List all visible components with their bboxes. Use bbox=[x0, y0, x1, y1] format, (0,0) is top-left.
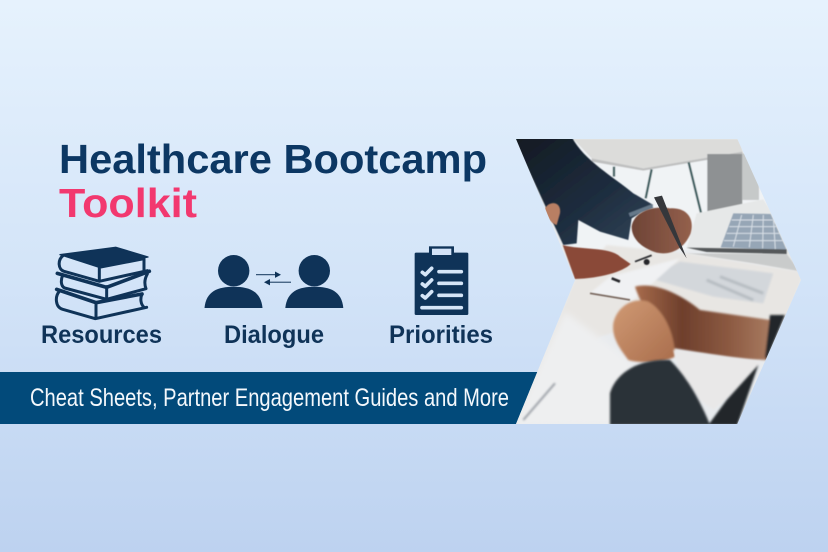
label: Dialogue: Dialogue bbox=[224, 321, 324, 349]
exchange arrows bbox=[256, 272, 291, 285]
banner text: Cheat Sheets, Partner Engagement Guides and More bbox=[30, 384, 509, 412]
table and document bbox=[513, 245, 801, 430]
office background bbox=[573, 137, 810, 272]
label: Priorities: Priorities bbox=[389, 321, 493, 349]
photo: business meeting chevron bbox=[516, 139, 801, 424]
white cuff bbox=[672, 348, 758, 360]
dark suit top left bbox=[513, 137, 653, 245]
dark suit foreground bbox=[610, 360, 758, 425]
laptop bbox=[687, 213, 787, 254]
label: Resources: Resources bbox=[41, 321, 162, 349]
title: Healthcare Bootcamp bbox=[59, 136, 487, 182]
icon: books bbox=[56, 247, 149, 319]
icon: priorities clipboard bbox=[415, 246, 468, 315]
gesturing hand bbox=[545, 203, 631, 279]
pen bbox=[654, 196, 687, 258]
banner bbox=[0, 372, 545, 424]
writing hand bbox=[632, 208, 692, 253]
title bbox=[59, 136, 487, 226]
left person bbox=[204, 255, 262, 308]
white sleeve foreground bbox=[516, 316, 597, 424]
title accent: Toolkit bbox=[59, 180, 197, 226]
clasped hands bbox=[613, 285, 785, 362]
clipboard edge and glasses bbox=[590, 255, 652, 300]
right person bbox=[285, 255, 343, 308]
icon: dialogue people bbox=[204, 255, 343, 308]
